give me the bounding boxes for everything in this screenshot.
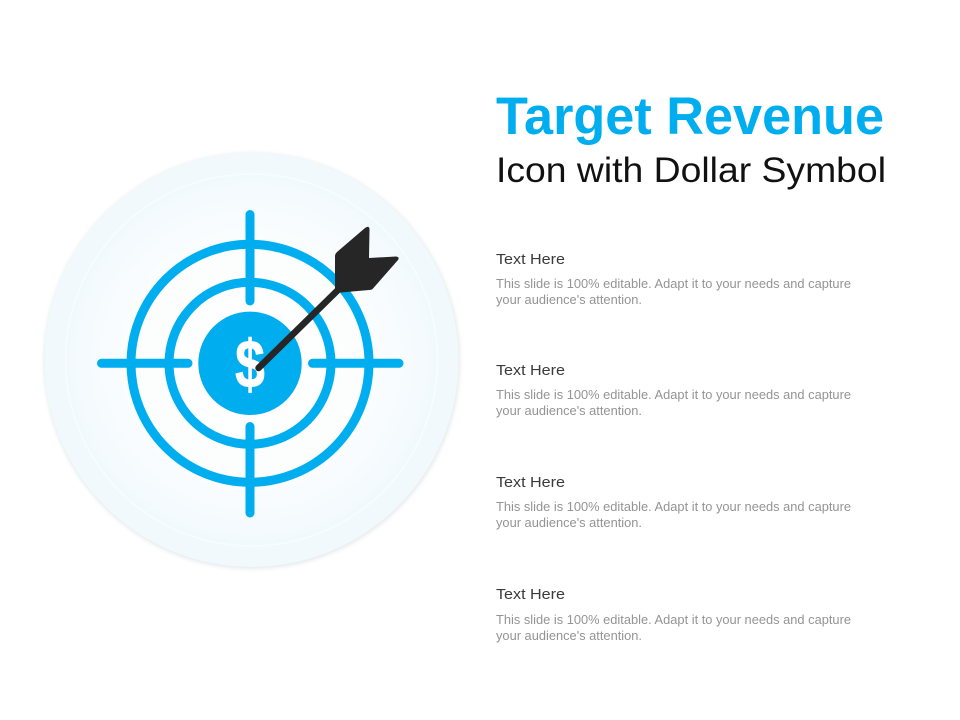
text block 3: This slide is 100% editable. Adapt it to your needs and capture [496,499,851,514]
target rings and crosshair [102,214,399,513]
title [496,87,886,190]
text block 1: This slide is 100% editable. Adapt it to your needs and capture [496,276,851,291]
text block 3 [496,474,851,530]
bullseye disc [198,312,302,415]
text block 1: Text Here [496,251,565,268]
text block 4: This slide is 100% editable. Adapt it to your needs and capture [496,612,851,627]
text block 4: Text Here [496,586,565,603]
title: Icon with Dollar Symbol [496,151,886,190]
badge background circle [44,153,460,568]
text block 2: your audience's attention. [496,403,642,418]
text block 2: Text Here [496,362,565,379]
text block 3: Text Here [496,474,565,491]
text block 1: your audience's attention. [496,292,642,307]
text block 1 [496,251,851,307]
text block 4 [496,586,851,643]
dart [258,227,399,368]
text block 2 [496,362,851,418]
text block 2: This slide is 100% editable. Adapt it to your needs and capture [496,387,851,402]
title: Target Revenue [496,87,884,146]
text block 3: your audience's attention. [496,515,642,530]
dollar symbol: $ [235,326,265,402]
icon: target revenue badge [44,153,460,568]
text block 4: your audience's attention. [496,628,642,643]
